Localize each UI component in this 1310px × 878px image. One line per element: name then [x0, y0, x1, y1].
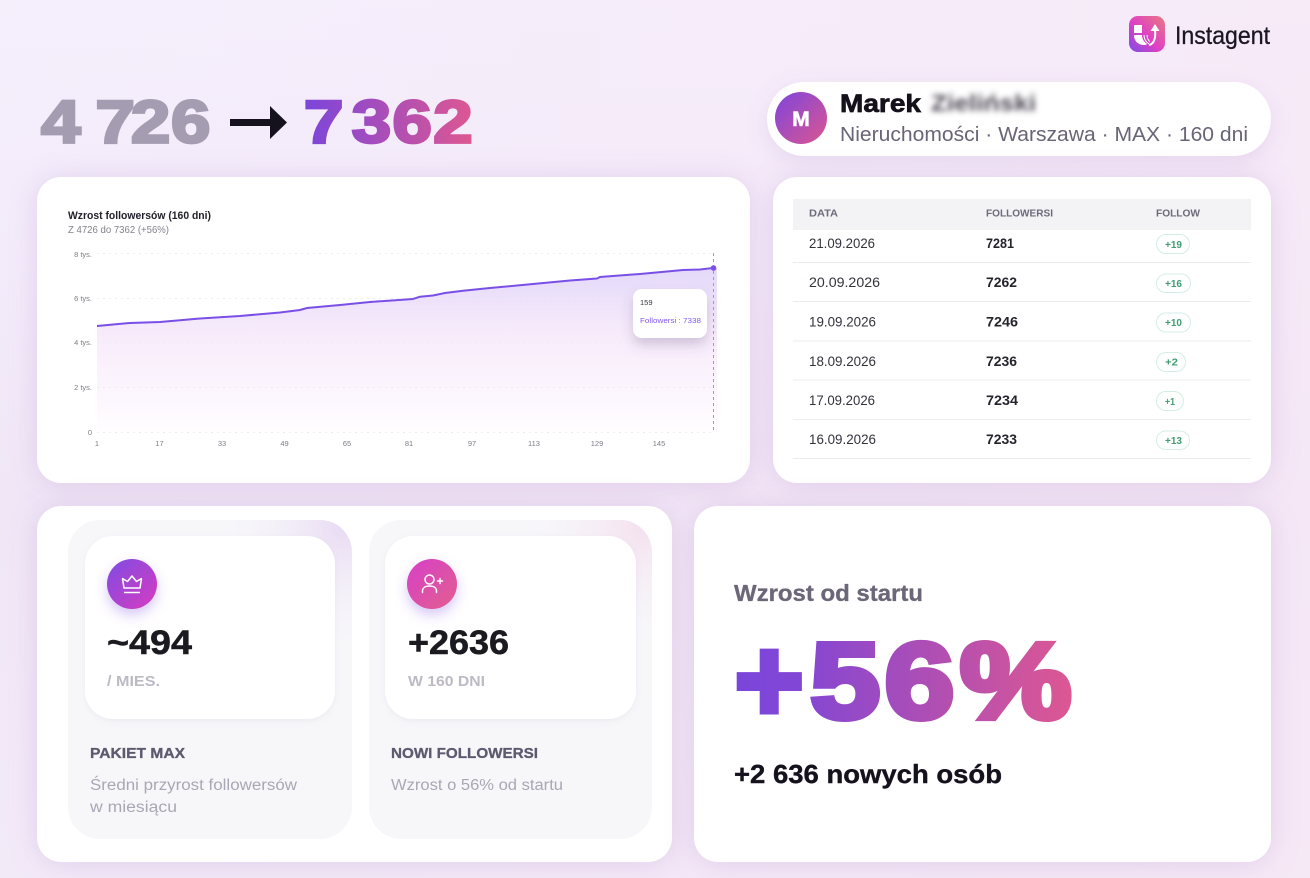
- table rows: +1: [1165, 397, 1175, 408]
- table rows: 7281: [986, 236, 1014, 251]
- table rows: +16: [1165, 279, 1182, 290]
- arrow: [230, 106, 287, 139]
- new followers value: +2636: [408, 624, 509, 662]
- logo: Instagent: [1129, 16, 1270, 52]
- avatar: [775, 92, 827, 144]
- icon: crown: [107, 559, 157, 609]
- line chart: 17: [155, 439, 164, 448]
- icon: add user: [407, 559, 457, 609]
- avatar: M: [792, 108, 810, 131]
- line chart: 145: [653, 439, 665, 448]
- panel: growth chart: [37, 177, 750, 483]
- card description: w miesiącu: [89, 799, 177, 816]
- monthly growth value: ~494: [107, 624, 192, 662]
- panel: stat cards: [37, 506, 672, 862]
- new people count: +2 636 nowych osób: [734, 759, 1002, 789]
- starting count: 4 726: [41, 89, 210, 155]
- chart tooltip: Followersi : 7338: [640, 316, 701, 325]
- table rows: 7262: [986, 275, 1017, 290]
- line chart: 129: [591, 439, 603, 448]
- table rows: 20.09.2026: [809, 275, 880, 290]
- line chart: 49: [280, 439, 289, 448]
- table rows: +19: [1165, 240, 1182, 251]
- panel: daily table: [773, 177, 1271, 483]
- line chart: 33: [218, 439, 226, 448]
- summary heading: Wzrost od startu: [734, 580, 923, 606]
- table rows: +2: [1165, 358, 1178, 368]
- table rows: 21.09.2026: [809, 236, 875, 251]
- table rows: 7246: [986, 314, 1019, 330]
- card description: [89, 776, 298, 816]
- table rows: 16.09.2026: [809, 432, 876, 447]
- profile details: Nieruchomości · Warszawa · MAX · 160 dni: [840, 123, 1248, 146]
- table header: FOLLOW: [1156, 208, 1201, 220]
- table rows: 7233: [986, 432, 1017, 447]
- card description: Średni przyrost followersów: [90, 776, 298, 794]
- card heading: PAKIET MAX: [90, 745, 185, 762]
- monthly unit: / MIES.: [107, 673, 160, 690]
- line chart: 0: [88, 428, 92, 437]
- stat card: new followers: [369, 520, 652, 839]
- chart tooltip: [633, 289, 707, 338]
- headline: follower count before and after: [41, 89, 473, 155]
- chart title: Wzrost followersów (160 dni): [68, 210, 211, 222]
- card heading: NOWI FOLLOWERSI: [391, 745, 538, 762]
- table rows: +10: [1165, 318, 1182, 329]
- line chart: 81: [405, 439, 413, 448]
- table rows: 17.09.2026: [809, 393, 875, 408]
- line chart: 6 tys.: [74, 294, 92, 303]
- panel: growth summary: [694, 506, 1271, 862]
- table rows: 7236: [986, 354, 1017, 369]
- table rows: +13: [1165, 436, 1182, 447]
- logo: Instagent: Instagent: [1175, 22, 1270, 50]
- name: Marek: [840, 90, 921, 118]
- line chart: 65: [343, 439, 351, 448]
- profile pill: [767, 82, 1271, 156]
- line chart: 4 tys.: [74, 338, 92, 347]
- blurred surname: Zieliński: [931, 90, 1036, 116]
- line chart: 97: [468, 439, 476, 448]
- line chart: [74, 250, 717, 448]
- final count: 7 362: [304, 89, 473, 155]
- line chart: 8 tys.: [74, 250, 92, 259]
- table rows: 18.09.2026: [809, 354, 876, 369]
- table header: [793, 199, 1251, 230]
- chart subtitle: Z 4726 do 7362 (+56%): [68, 225, 169, 236]
- chart tooltip: 159: [640, 298, 653, 307]
- card description: Wzrost o 56% od startu: [391, 777, 563, 794]
- table rows: [793, 234, 1251, 458]
- line chart: 1: [95, 439, 99, 448]
- big percentage: 56%: [810, 620, 1071, 741]
- line chart: 2 tys.: [74, 383, 92, 392]
- period label: W 160 DNI: [408, 673, 485, 690]
- table rows: 19.09.2026: [809, 314, 876, 330]
- table rows: 7234: [986, 393, 1019, 408]
- line chart: 113: [528, 439, 540, 448]
- table header: DATA: [809, 208, 838, 220]
- stat card: MAX package: [68, 520, 352, 839]
- big percentage: +: [735, 615, 804, 747]
- table header: FOLLOWERSI: [986, 208, 1053, 220]
